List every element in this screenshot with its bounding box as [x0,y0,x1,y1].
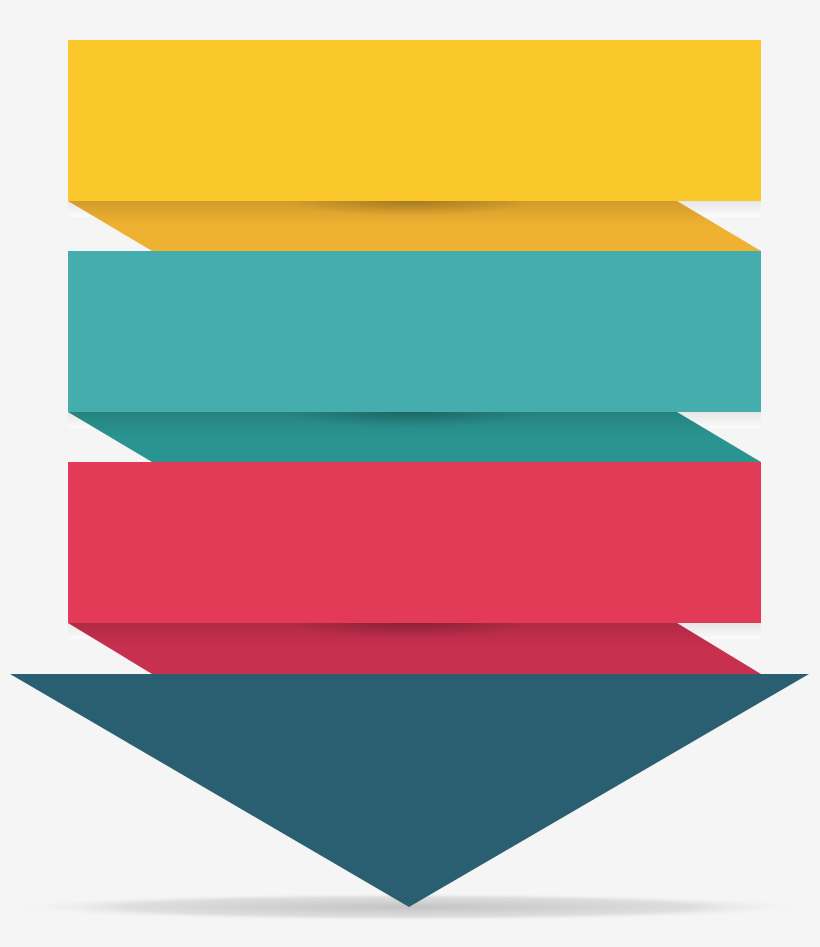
fold 2 [68,412,761,462]
band 2: teal [68,251,761,462]
fold 3 [68,623,761,674]
fold 1 [68,201,761,251]
band 3: red [68,462,761,674]
arrow head [10,674,809,907]
band 1: yellow [68,40,761,251]
shadow under arrow [5,893,815,921]
